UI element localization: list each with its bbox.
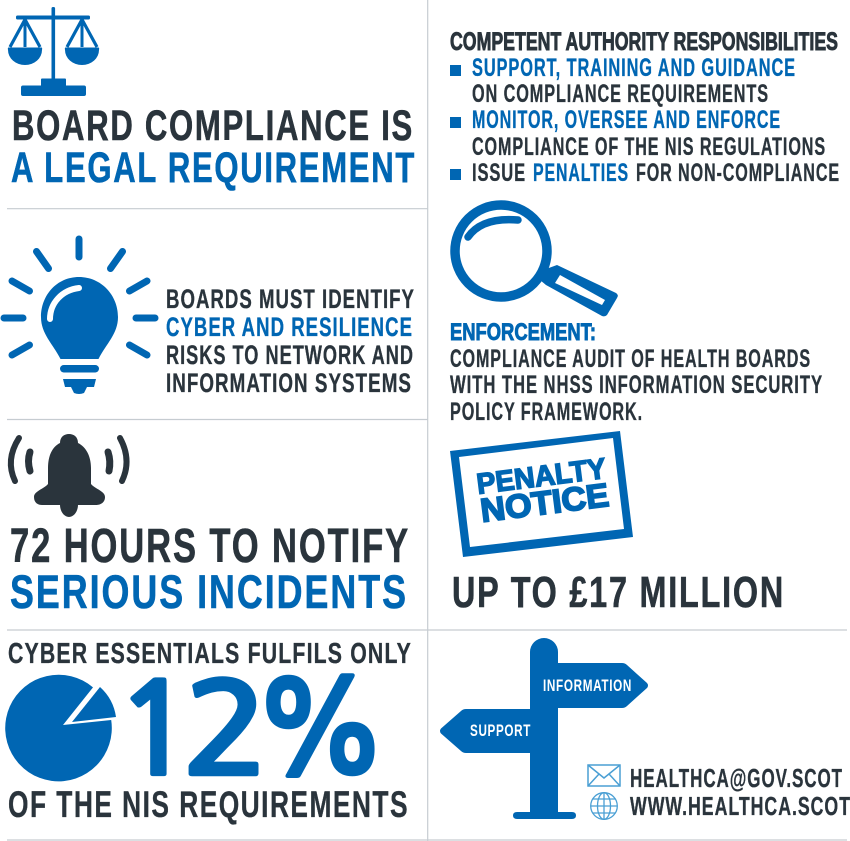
panel: penalty xyxy=(450,431,785,617)
text: identify risks xyxy=(166,284,415,398)
text: identify risks: BOARDS MUST IDENTIFY xyxy=(166,284,415,314)
chart: pie 12 percent xyxy=(5,675,116,781)
text: identify risks: RISKS TO NETWORK AND xyxy=(166,340,414,370)
text: cyber essentials: CYBER ESSENTIALS FULFILS ONLY xyxy=(8,638,412,670)
icon: light bulb xyxy=(4,239,155,394)
list: responsibilities: PENALTIES xyxy=(533,159,629,187)
stat: 12 percent xyxy=(113,667,388,795)
panel: cyber essentials xyxy=(5,638,412,825)
stat: 12 percent: % xyxy=(253,668,388,795)
heading: enforcement: ENFORCEMENT: xyxy=(450,319,596,346)
heading: 72 hours: SERIOUS INCIDENTS xyxy=(10,565,408,618)
list: responsibilities: ISSUE xyxy=(472,159,526,187)
panel: board compliance xyxy=(8,7,416,192)
heading: board compliance xyxy=(11,102,416,192)
icon: scales of justice xyxy=(8,7,99,96)
icon: globe xyxy=(591,793,617,819)
icon: envelope xyxy=(588,765,620,786)
stat: 12 percent: 1 xyxy=(113,667,197,794)
panel: competent authority xyxy=(450,28,840,187)
stat: 12 percent: 2 xyxy=(181,667,271,794)
text: enforcement detail: POLICY FRAMEWORK. xyxy=(450,398,643,426)
text: nis requirements: OF THE NIS REQUIREMENTS xyxy=(8,784,409,825)
panel: identify risks xyxy=(4,239,415,398)
icon: signpost: SUPPORT xyxy=(470,722,531,740)
icon: signpost: INFORMATION xyxy=(543,677,632,695)
heading: 72 hours: 72 HOURS TO NOTIFY xyxy=(10,520,410,573)
heading: 72 hours xyxy=(10,520,410,618)
text: identify risks: INFORMATION SYSTEMS xyxy=(166,368,412,398)
icon: magnifying glass xyxy=(455,205,618,316)
panel: contact xyxy=(440,638,850,821)
heading: board compliance: A LEGAL REQUIREMENT xyxy=(11,144,416,192)
text: identify risks: CYBER AND RESILIENCE xyxy=(166,312,413,342)
icon: signpost xyxy=(440,638,648,819)
list: responsibilities xyxy=(450,54,840,187)
icon: penalty notice stamp: NOTICE xyxy=(478,476,611,529)
icon: ringing bell xyxy=(11,434,127,517)
icon: penalty notice stamp xyxy=(450,431,633,557)
text: enforcement detail xyxy=(450,345,823,426)
icon: penalty notice stamp: PENALTY xyxy=(475,453,608,501)
panel: enforcement xyxy=(450,205,823,426)
panel: 72 hours xyxy=(10,434,410,618)
heading: board compliance: BOARD COMPLIANCE IS xyxy=(12,102,414,150)
